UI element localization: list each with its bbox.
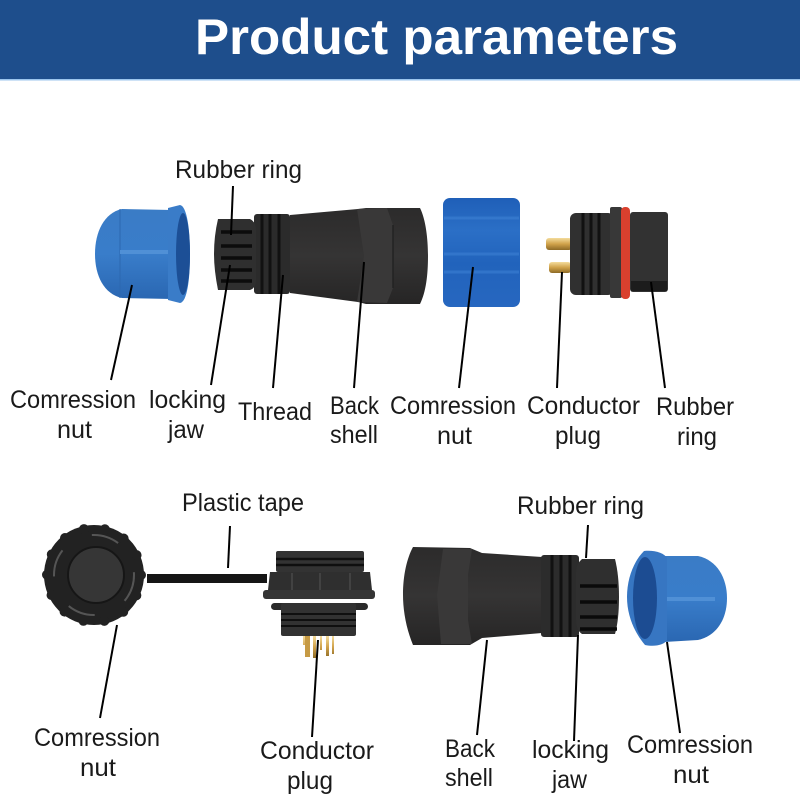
- labels: bottom row: plug: [287, 767, 333, 795]
- labels: bottom row: locking: [532, 736, 609, 764]
- labels: top row: plug: [555, 422, 601, 450]
- icon: blue compression nut cap (bottom): [627, 551, 727, 646]
- icon: back shell, thread and jaw (bottom): [403, 547, 619, 645]
- labels: top row: Conductor: [527, 392, 640, 420]
- labels: bottom row: Back: [445, 735, 495, 763]
- labels: bottom row: Comression: [34, 724, 160, 752]
- labels: bottom row: shell: [445, 764, 493, 792]
- icon: panel mount socket: [263, 551, 375, 658]
- icon: blue compression nut (middle): [443, 198, 520, 307]
- labels: bottom row: Rubber ring: [517, 492, 644, 520]
- labels: top row: nut: [437, 422, 472, 450]
- labels: top row: locking: [149, 386, 226, 414]
- labels: bottom row: nut: [80, 754, 116, 782]
- title: Product parameters: [195, 9, 678, 65]
- labels: top row: Rubber: [656, 393, 734, 421]
- header band: [0, 0, 800, 80]
- labels: bottom row: Plastic tape: [182, 489, 304, 517]
- labels: top row: shell: [330, 421, 378, 449]
- labels: top row: Rubber ring: [175, 156, 302, 184]
- labels: bottom row: Comression: [627, 731, 753, 759]
- icon: plastic strap: [147, 574, 267, 583]
- icon: blue compression nut cap (top): [95, 205, 190, 303]
- labels: bottom row: [34, 489, 753, 795]
- labels: top row: Back: [330, 392, 379, 420]
- labels: top row: jaw: [167, 416, 205, 444]
- labels: top row: Thread: [238, 398, 312, 426]
- leader lines: [100, 186, 680, 741]
- labels: top row: Comression: [390, 392, 516, 420]
- labels: bottom row: Conductor: [260, 737, 374, 765]
- icon: conductor plug with red ring: [546, 207, 668, 299]
- labels: bottom row: jaw: [551, 766, 588, 794]
- icon: round sealing cap: [44, 525, 144, 625]
- icon: locking jaw, thread and back shell (top): [214, 208, 428, 304]
- labels: top row: ring: [677, 423, 717, 451]
- labels: bottom row: nut: [673, 761, 709, 789]
- labels: top row: Comression: [10, 386, 136, 414]
- labels: top row: nut: [57, 416, 92, 444]
- labels: top row: [10, 156, 734, 451]
